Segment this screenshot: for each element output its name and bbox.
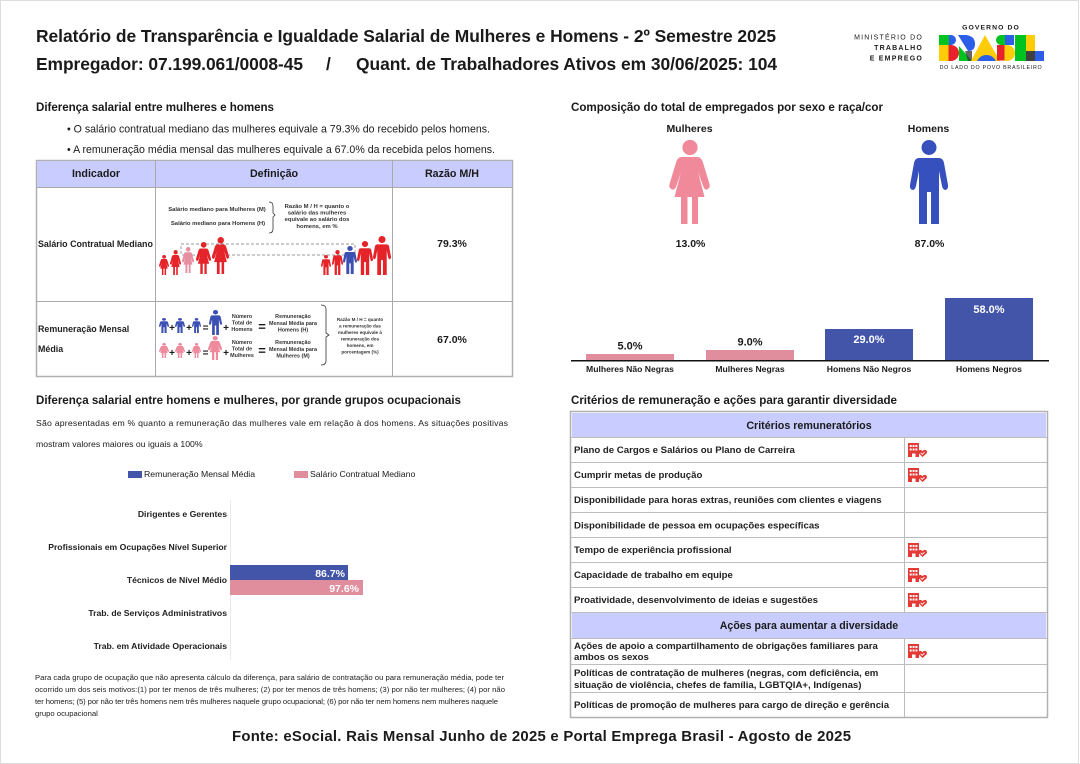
icons: empresa com selo [908, 443, 927, 658]
criteria labels: Políticas de promoção de mulheres para cargo de direção e gerência [574, 700, 890, 711]
logo: Governo do Brasil: GOVERNO DO [962, 24, 1020, 32]
diagram: salário mediano: salário das mulheres [288, 210, 347, 216]
diagram: remuneração média: Total de [232, 320, 252, 326]
group labels [48, 509, 228, 651]
pictogram: mulheres [666, 123, 713, 250]
pictogram: mulheres: Mulheres [666, 123, 713, 135]
row values: 67.0% [437, 334, 468, 346]
bar chart: sexo e raça: 5.0% [617, 340, 643, 352]
diagram: remuneração média: mulheres equivale à [338, 330, 382, 335]
criteria labels: ambos os sexos [574, 652, 649, 663]
bar chart: sexo e raça: 9.0% [737, 336, 763, 348]
diagram: remuneração média [159, 305, 383, 365]
bar chart: sexo e raça [571, 298, 1049, 374]
diagram: remuneração média: = [258, 319, 266, 334]
table headers: Definição [250, 168, 299, 180]
diagram: remuneração média: homens, em [347, 343, 373, 348]
table section headers: Critérios remuneratórios [746, 420, 872, 432]
table headers [72, 168, 479, 180]
pictogram: mulheres: 13.0% [676, 238, 706, 250]
diagram: remuneração média: Mulheres [230, 353, 254, 359]
diagram: remuneração média: + [169, 323, 175, 334]
table headers: Indicador [72, 168, 120, 180]
title [36, 26, 777, 74]
heading: grupos ocupacionais: Diferença salarial entre homens e mulheres, por grande grupos ocupacionais [36, 394, 461, 407]
logo: Governo do Brasil: DO LADO DO POVO BRASILEIRO [940, 65, 1042, 71]
row values [437, 238, 468, 346]
diagram: remuneração média: Número [232, 340, 253, 346]
legend: Salário Contratual Mediano [310, 469, 415, 479]
criteria labels: Disponibilidade de pessoa em ocupações específicas [574, 520, 820, 532]
pictogram: homens [908, 123, 949, 250]
axis [230, 500, 232, 660]
panel: critérios [570, 394, 1048, 718]
title: Quant. de Trabalhadores Ativos em 30/06/2025: 104 [356, 54, 777, 74]
diagram: remuneração média: + [169, 348, 175, 359]
row labels: Salário Contratual Mediano [38, 239, 153, 249]
diagram: remuneração média: Mensal Média para [269, 347, 318, 353]
footer: fonte: Fonte: eSocial. Rais Mensal Junho de 2025 e Portal Emprega Brasil - Agosto de 2025 [232, 729, 851, 745]
table: indicadores [36, 160, 513, 377]
title: / [326, 54, 331, 74]
table headers: Razão M/H [425, 168, 479, 180]
heading: diferença salarial: Diferença salarial entre mulheres e homens [36, 101, 274, 114]
bar chart: sexo e raça: Mulheres Negras [715, 364, 785, 374]
pictogram: homens: Homens [908, 123, 949, 135]
criteria labels: Disponibilidade para horas extras, reuniões com clientes e viagens [574, 495, 882, 506]
pictogram: homens: 87.0% [915, 238, 945, 250]
row labels [38, 239, 153, 354]
diagram: remuneração média: Número [232, 314, 253, 320]
bar: remuneração técnicos [230, 565, 348, 580]
group labels: Trab. de Serviços Administrativos [88, 608, 227, 618]
diagram: remuneração média: Homens (H) [278, 328, 308, 334]
diagram: remuneração média: Mensal Média para [269, 321, 318, 327]
diagram: remuneração média: Homens [231, 327, 253, 333]
criteria labels: Plano de Cargos e Salários ou Plano de Carreira [574, 445, 796, 456]
text block: nota [35, 673, 505, 718]
text block: nota: ocorrido um dos seis motivos:(1) por ter menos de três mulheres; (2) por ter menos de três homens; (3) por não ter mulheres; (4) por não [35, 685, 505, 694]
bar: salário técnicos: 97.6% [329, 583, 360, 595]
heading: critérios: Critérios de remuneração e ações para garantir diversidade [571, 394, 898, 407]
title: Relatório de Transparência e Igualdade Salarial de Mulheres e Homens - 2º Semestre 2025 [36, 26, 776, 46]
text block: bullets [67, 124, 495, 156]
bar chart: sexo e raça: Homens Não Negros [827, 364, 911, 374]
bar chart: sexo e raça: Homens Negros [956, 364, 1022, 374]
criteria labels: Políticas de contratação de mulheres (negras, com deficiência, em [574, 668, 878, 679]
diagram: remuneração média: remuneração dos [341, 336, 380, 342]
panel: grupos ocupacionais [35, 394, 509, 718]
heading: composição: Composição do total de empregados por sexo e raça/cor [571, 101, 883, 114]
diagram: remuneração média: Razão M / H = quanto [337, 317, 383, 322]
logo: Ministério do Trabalho e Emprego [854, 32, 923, 62]
logo: Ministério do Trabalho e Emprego: TRABALHO [874, 45, 923, 52]
row labels: Remuneração Mensal [38, 324, 129, 334]
diagram: salário mediano: Salário mediano para Homens (H) [171, 221, 265, 227]
criteria labels [574, 445, 890, 711]
bar chart: sexo e raça: 58.0% [973, 304, 1005, 316]
bar: salário técnicos [230, 580, 363, 595]
diagram: salário mediano: homens, em % [296, 224, 338, 230]
diagram: remuneração média: + [186, 348, 192, 359]
text block: bullets: • O salário contratual mediano das mulheres equivale a 79.3% do recebido pelos homens. [67, 124, 490, 136]
legend: Remuneração Mensal Média [144, 469, 255, 479]
text block: nota: ter homens; (5) por não ter três homens nem três mulheres naquele grupo ocupacional; (6) por não ter nem homens nem mulheres naquele [35, 697, 498, 706]
diagram: remuneração média: + [186, 323, 192, 334]
diagram: remuneração média: = [203, 348, 209, 359]
legend [128, 469, 415, 479]
group labels: Trab. em Atividade Operacionais [94, 641, 227, 651]
diagram: remuneração média: Mulheres (M) [276, 354, 310, 360]
text block: bullets: • A remuneração média mensal das mulheres equivale a 67.0% da recebida pelos homens. [67, 144, 495, 156]
diagram: remuneração média: a remuneração das [339, 324, 381, 328]
diagram: remuneração média: = [203, 323, 209, 334]
diagram: remuneração média: Remuneração [275, 314, 312, 320]
title: Empregador: 07.199.061/0008-45 [36, 54, 303, 74]
diagram: remuneração média: + [223, 348, 229, 359]
diagram: salário mediano: Razão M / H = quanto o [285, 204, 350, 210]
diagram: remuneração média: Total de [232, 346, 252, 352]
text block: explicação [36, 418, 509, 449]
text block: explicação: São apresentadas em % quanto a remuneração das mulheres vale em relação à dos homens. As situações positivas [36, 418, 509, 428]
table section headers [720, 420, 898, 632]
criteria labels: Ações de apoio a compartilhamento de obrigações familiares para [574, 641, 878, 652]
criteria labels: Proatividade, desenvolvimento de ideias e sugestões [574, 595, 818, 606]
text block: explicação: mostram valores maiores ou iguais a 100% [36, 439, 203, 449]
bar chart: sexo e raça: 29.0% [853, 334, 885, 346]
table section headers: Ações para aumentar a diversidade [720, 620, 898, 632]
row values: 79.3% [437, 238, 468, 250]
criteria labels: Tempo de experiência profissional [574, 545, 732, 556]
diagram: salário mediano: equivale ao salário dos [285, 217, 350, 223]
group labels: Profissionais em Ocupações Nível Superior [48, 542, 228, 552]
panel: composição [571, 101, 1049, 374]
logo: Ministério do Trabalho e Emprego: MINISTÉRIO DO [854, 32, 923, 42]
logo: Governo do Brasil [939, 24, 1044, 71]
group labels: Dirigentes e Gerentes [138, 509, 227, 519]
criteria labels: Capacidade de trabalho em equipe [574, 570, 734, 581]
table: critérios [570, 412, 1048, 718]
bar chart: sexo e raça: Mulheres Não Negras [586, 364, 674, 374]
text block: nota: Para cada grupo de ocupação que não apresenta cálculo da diferença, para salário de contratação ou para remuneração média, pode ter [35, 673, 504, 682]
text block: nota: grupo ocupacional [35, 709, 98, 718]
diagram: remuneração média: porcentagem (%) [341, 350, 379, 354]
criteria labels: Cumprir metas de produção [574, 470, 702, 481]
group labels: Técnicos de Nível Médio [127, 575, 227, 585]
diagram: salário mediano: Salário mediano para Mulheres (M) [168, 207, 266, 213]
row labels: Média [38, 344, 63, 354]
diagram: salário mediano [159, 202, 391, 275]
diagram: remuneração média: + [223, 323, 229, 334]
logo: Ministério do Trabalho e Emprego: E EMPREGO [870, 56, 923, 62]
diagram: remuneração média: = [258, 343, 266, 358]
diagram: remuneração média: Remuneração [275, 340, 312, 346]
panel: diferença salarial [36, 101, 513, 377]
criteria labels: situação de violência, chefes de família, LGBTQIA+, Indígenas) [574, 680, 862, 691]
bar: remuneração técnicos: 86.7% [315, 568, 346, 580]
